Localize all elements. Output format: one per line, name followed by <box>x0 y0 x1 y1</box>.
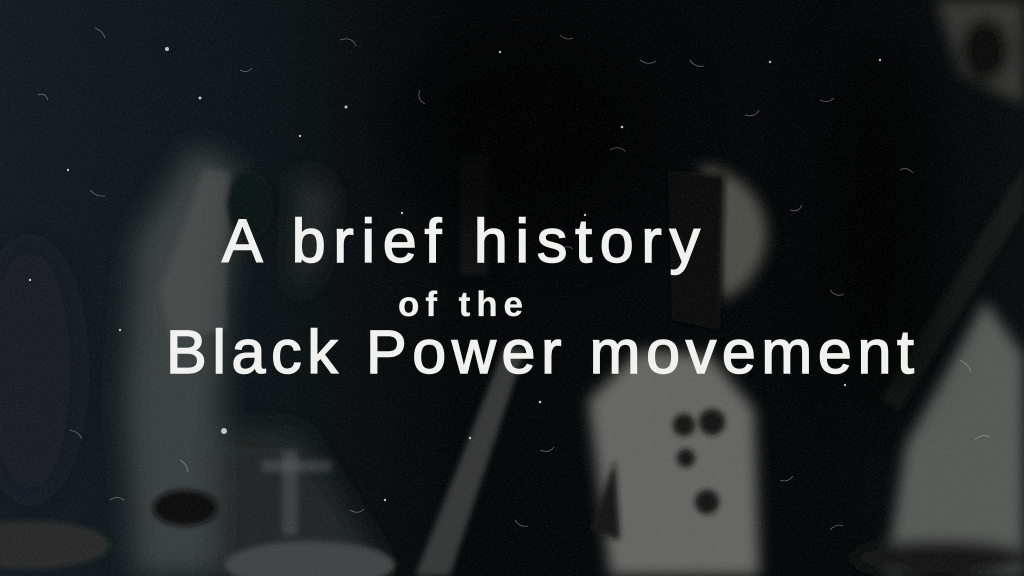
left figure <box>0 145 390 576</box>
title line: A brief history: A brief history <box>222 207 700 275</box>
title <box>166 207 914 386</box>
left figure lower detail <box>0 168 395 576</box>
dark haze <box>390 20 940 400</box>
title line: Black Power movement: Black Power movement <box>166 318 914 386</box>
right figure <box>850 0 1024 576</box>
diagonal scratches <box>415 155 1024 576</box>
title line: of the: of the <box>398 285 523 324</box>
centre figure <box>588 165 767 576</box>
centre figure details <box>590 170 725 540</box>
